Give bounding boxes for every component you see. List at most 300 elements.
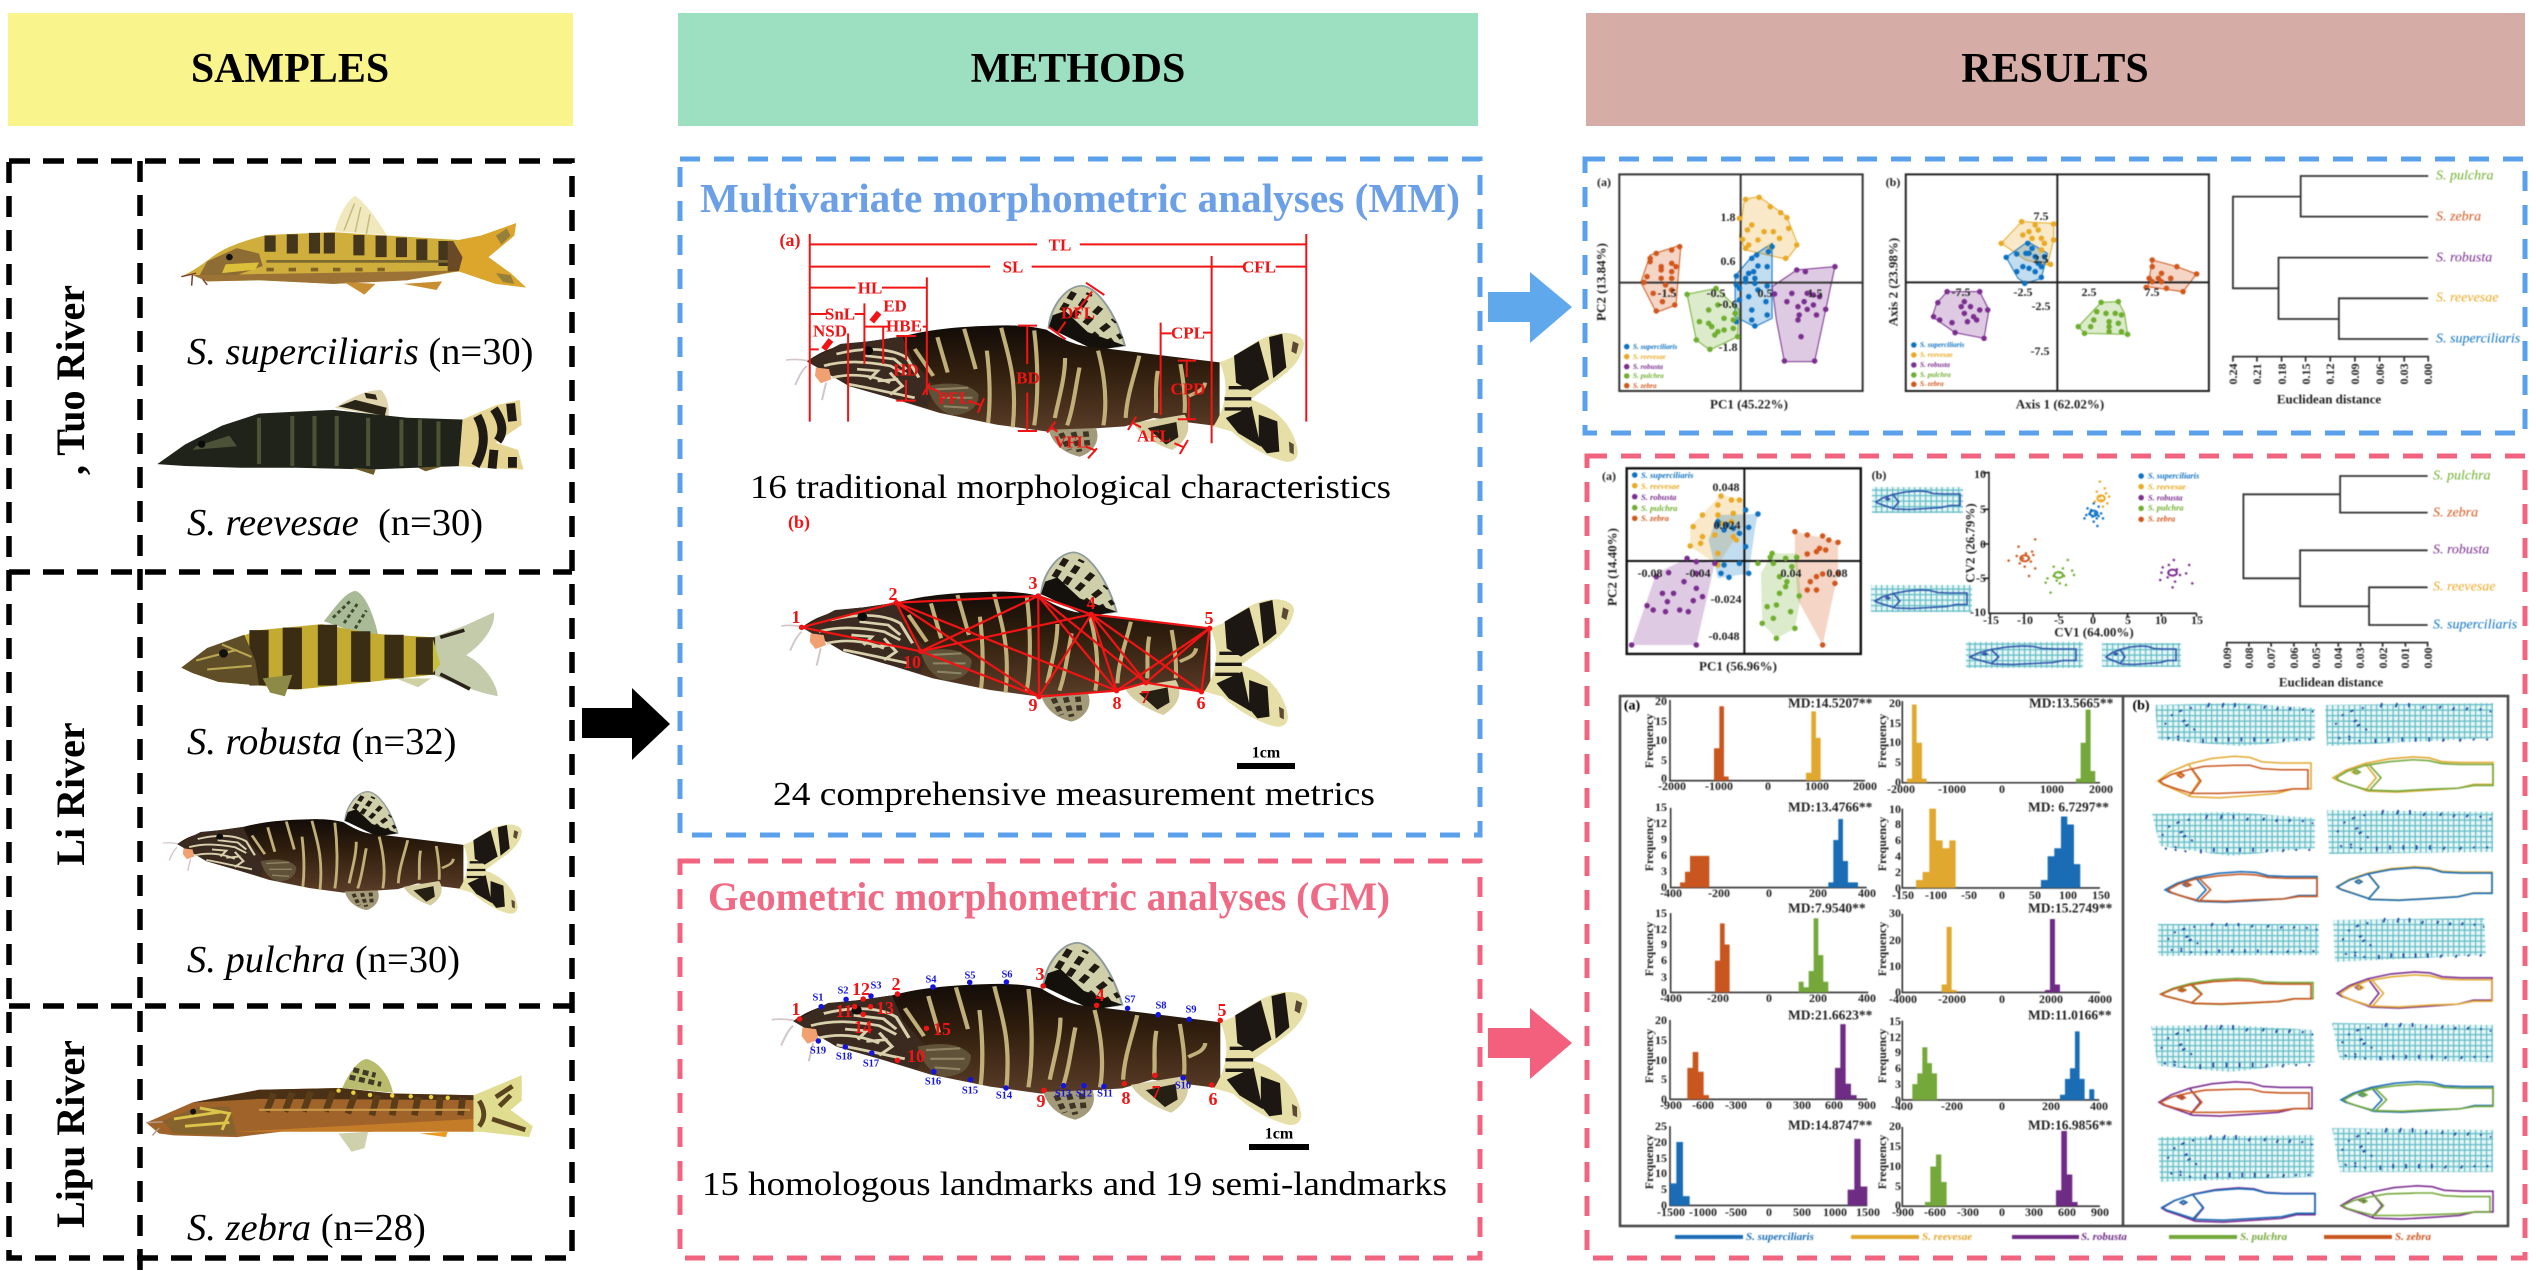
axis text and legend: (a) bbox=[1597, 175, 1611, 189]
arrow: to GM results bbox=[1488, 1008, 1572, 1079]
histogram x axis labels: -150 bbox=[1892, 888, 1914, 902]
fish photo substitute bbox=[772, 943, 1308, 1125]
histogram x axis labels: 0 bbox=[1766, 1205, 1772, 1219]
axis text and legend: S. reevesae bbox=[1633, 353, 1667, 361]
legend: species colours: S. superciliaris bbox=[1746, 1231, 1814, 1243]
axis text and legend: -1.5 bbox=[1658, 286, 1676, 300]
histogram x axis labels: 1000 bbox=[1805, 779, 1829, 793]
plot area and clusters bbox=[1627, 468, 1861, 654]
truss labels: 10 bbox=[903, 652, 921, 672]
histogram y axis labels: 0 bbox=[1895, 1198, 1901, 1212]
semi-landmark labels: S4 bbox=[925, 974, 937, 986]
species labels: S. pulchra bbox=[2436, 168, 2494, 184]
histogram y axis labels: 0 bbox=[1895, 1093, 1901, 1107]
distance axis labels: 0.09 bbox=[2220, 648, 2234, 668]
histogram x axis labels: -500 bbox=[1725, 1205, 1747, 1219]
legend: species colours: S. reevesae bbox=[1922, 1231, 1972, 1243]
semi-landmark labels: S19 bbox=[810, 1046, 826, 1056]
histogram y axis labels: 3 bbox=[1661, 864, 1667, 878]
histogram y axis labels: 10 bbox=[1655, 1053, 1667, 1067]
axis text and legend: 1.8 bbox=[1720, 210, 1736, 224]
species labels: S. pulchra bbox=[2433, 468, 2491, 484]
fish: S. superciliaris bbox=[181, 196, 526, 295]
semi-landmark labels: S3 bbox=[870, 980, 882, 992]
measurement labels: CFL bbox=[1242, 258, 1276, 276]
histogram y axis labels: 6 bbox=[1895, 1061, 1901, 1075]
panel: samples bbox=[9, 161, 572, 1271]
histogram y axis labels: 12 bbox=[1655, 816, 1667, 830]
measurement labels: (a) bbox=[780, 230, 800, 251]
legend: species colours: S. robusta bbox=[2081, 1231, 2127, 1243]
histogram y axis labels: 9 bbox=[1895, 1045, 1901, 1059]
histogram x axis labels: 2000 bbox=[1853, 779, 1877, 793]
semi-landmark labels: S7 bbox=[1124, 994, 1136, 1006]
distance axis labels: 0.08 bbox=[2242, 648, 2256, 668]
histogram x axis labels: 0 bbox=[1766, 1098, 1772, 1112]
measurement labels: PFL bbox=[938, 388, 970, 408]
axis text and legend: 10 bbox=[2155, 613, 2167, 627]
species labels: S. robusta bbox=[2433, 542, 2489, 558]
histogram y axis labels: 15 bbox=[1889, 1014, 1901, 1028]
axis text and legend: S. zebra bbox=[1633, 382, 1657, 390]
axis text and legend: 15 bbox=[2191, 613, 2203, 627]
histogram x axis labels: -2000 bbox=[1938, 992, 1966, 1006]
distance axis labels: 0.06 bbox=[2373, 364, 2387, 384]
histogram x axis labels: -200 bbox=[1707, 991, 1729, 1005]
histogram x axis labels: 900 bbox=[1858, 1098, 1876, 1112]
histogram y axis labels: 15 bbox=[1655, 1151, 1667, 1165]
axis text and legend: 0.04 bbox=[1780, 566, 1802, 580]
histogram x axis labels: -400 bbox=[1891, 1099, 1913, 1113]
truss labels: 3 bbox=[1028, 573, 1038, 593]
axis text and legend: S. reevesae bbox=[1641, 481, 1680, 491]
axis text and legend bbox=[1594, 175, 1822, 412]
histogram x axis labels: 0 bbox=[1999, 1205, 2005, 1219]
truss labels: 2 bbox=[888, 584, 898, 604]
caption: traditional characteristics: 16 traditional morphological characteristics bbox=[750, 469, 1391, 506]
histogram y axis labels: 15 bbox=[1889, 1139, 1901, 1153]
histogram x axis labels: -300 bbox=[1725, 1098, 1747, 1112]
axis text and legend bbox=[1872, 467, 2203, 640]
semi-landmark labels: S13 bbox=[1055, 1088, 1071, 1100]
measurement labels: HL bbox=[858, 278, 882, 298]
panel: GM results bbox=[1587, 456, 2525, 1258]
axis text and legend: S. zebra bbox=[1920, 380, 1944, 388]
axis text and legend: -0.04 bbox=[1686, 566, 1710, 580]
measurement labels: HBE bbox=[886, 316, 922, 336]
panel border bbox=[1585, 159, 2525, 433]
species label: pulchra: S. pulchra (n=30) bbox=[187, 939, 460, 981]
histogram x axis labels bbox=[1657, 779, 2113, 1219]
histogram y axis labels: 8 bbox=[1895, 817, 1901, 831]
heading: GM: Geometric morphometric analyses (GM) bbox=[708, 874, 1390, 919]
axis text and legend: S. zebra bbox=[2148, 514, 2175, 524]
species labels: S. superciliaris bbox=[2433, 618, 2518, 632]
histogram y axis labels: 5 bbox=[1895, 1179, 1901, 1193]
shape deformation thumbnails bbox=[1871, 487, 2181, 668]
histogram x axis labels: 300 bbox=[1793, 1098, 1811, 1112]
homologous landmark labels: 6 bbox=[1208, 1089, 1218, 1109]
histogram x axis labels: 0 bbox=[1999, 992, 2005, 1006]
heading: MM: Multivariate morphometric analyses (MM) bbox=[700, 175, 1460, 221]
fish with landmarks bbox=[772, 943, 1309, 1150]
axis text and legend bbox=[1602, 469, 1848, 674]
histogram x axis labels: 500 bbox=[1793, 1205, 1811, 1219]
axis text and legend: 0 bbox=[2090, 613, 2096, 627]
measurement labels: CPD bbox=[1171, 380, 1205, 398]
histogram y axis labels: 10 bbox=[1889, 1159, 1901, 1173]
histogram y axis labels: 20 bbox=[1889, 933, 1901, 947]
axis text and legend: 5 bbox=[2125, 613, 2131, 627]
histogram x axis labels: -900 bbox=[1892, 1205, 1914, 1219]
histogram y axis labels: 9 bbox=[1661, 937, 1667, 951]
histogram y axis labels: 15 bbox=[1655, 906, 1667, 920]
frequency axis titles: Frequency bbox=[1875, 817, 1889, 871]
histogram x axis labels: 400 bbox=[1858, 991, 1876, 1005]
homologous landmark labels: 10 bbox=[907, 1046, 925, 1066]
histogram x axis labels: 2000 bbox=[2089, 782, 2113, 796]
axis text and legend: -5 bbox=[1976, 571, 1986, 585]
axis text and legend: S. robusta bbox=[1633, 363, 1663, 371]
truss labels: 7 bbox=[1140, 687, 1150, 707]
frequency axis titles: Frequency bbox=[1875, 1135, 1889, 1189]
homologous landmark labels: 9 bbox=[1036, 1091, 1046, 1111]
axis text and legend: S. pulchra bbox=[1920, 371, 1951, 379]
measurement labels: TL bbox=[1049, 236, 1071, 254]
histogram y axis labels: 10 bbox=[1655, 733, 1667, 747]
histogram y axis labels: 20 bbox=[1655, 1013, 1667, 1027]
axis text and legend bbox=[1886, 175, 2160, 412]
histogram x axis labels: 50 bbox=[2029, 888, 2041, 902]
CVA axes and points bbox=[1983, 472, 2197, 617]
panel letters: (b) bbox=[2132, 698, 2150, 714]
axis text and legend: S. pulchra bbox=[1641, 503, 1678, 513]
distance axis labels: 0.06 bbox=[2287, 648, 2301, 668]
legend: species colours: S. pulchra bbox=[2240, 1231, 2288, 1243]
deformation grids bbox=[2151, 703, 2493, 1182]
histogram x axis labels: -2000 bbox=[1658, 779, 1686, 793]
histogram x axis labels: -2000 bbox=[1887, 782, 1915, 796]
header: samples: SAMPLES bbox=[191, 46, 389, 92]
histogram y axis labels: 12 bbox=[1655, 922, 1667, 936]
distance axis labels: 0.02 bbox=[2376, 648, 2390, 668]
measurement labels: AFL bbox=[1137, 426, 1171, 446]
truss labels: 1 bbox=[792, 607, 800, 627]
histogram x axis labels: -1000 bbox=[1689, 1205, 1717, 1219]
histogram x axis labels: -200 bbox=[1941, 1099, 1963, 1113]
axis text and legend: S. superciliaris bbox=[1641, 470, 1694, 480]
histogram x axis labels: -300 bbox=[1957, 1205, 1979, 1219]
histogram y axis labels bbox=[1655, 694, 1901, 1212]
mean difference labels: MD:21.6623** bbox=[1788, 1008, 1873, 1022]
fish with morphological measures bbox=[780, 230, 1306, 462]
mean difference labels: MD: 6.7297** bbox=[2028, 800, 2109, 814]
histogram x axis labels: -600 bbox=[1692, 1098, 1714, 1112]
axis text and legend: 0 bbox=[1980, 537, 1986, 551]
axis text and legend: -0.024 bbox=[1710, 592, 1742, 606]
histogram y axis labels: 6 bbox=[1895, 833, 1901, 847]
histogram y axis labels: 20 bbox=[1889, 696, 1901, 710]
histogram x axis labels: 100 bbox=[2059, 888, 2077, 902]
histogram y axis labels: 25 bbox=[1655, 1119, 1667, 1133]
axis text and legend: 2.5 bbox=[2082, 285, 2096, 299]
measurement labels: CPL bbox=[1171, 324, 1205, 342]
histogram x axis labels: 400 bbox=[1858, 886, 1876, 900]
histogram x axis labels: -900 bbox=[1660, 1098, 1682, 1112]
fish: S. reevesae bbox=[157, 390, 524, 475]
semi-landmark labels: S1 bbox=[812, 992, 824, 1004]
histogram y axis labels: 9 bbox=[1661, 832, 1667, 846]
axis text and legend: 0.024 bbox=[1714, 518, 1740, 532]
semi-landmark labels: S12 bbox=[1076, 1088, 1092, 1100]
histogram y axis labels: 30 bbox=[1889, 906, 1901, 920]
axis text and legend: 7.5 bbox=[2034, 209, 2048, 223]
homologous landmark labels: 7 bbox=[1152, 1082, 1160, 1102]
panel: geometric morphometric analyses bbox=[680, 861, 1480, 1258]
species labels: S. reevesae bbox=[2433, 580, 2495, 594]
header: samples bbox=[8, 13, 573, 126]
truss labels: 4 bbox=[1086, 593, 1096, 613]
axis text and legend: (b) bbox=[1872, 468, 1886, 482]
histogram x axis labels: -4000 bbox=[1889, 992, 1917, 1006]
distance axis labels: 0.21 bbox=[2250, 364, 2264, 384]
plot area and clusters bbox=[1906, 174, 2209, 391]
axis text and legend: S. reevesae bbox=[1920, 351, 1954, 359]
fish with truss network bbox=[781, 512, 1295, 769]
homologous landmark labels: 3 bbox=[1036, 964, 1044, 984]
histogram y axis labels: 10 bbox=[1889, 959, 1901, 973]
truss labels: 5 bbox=[1204, 608, 1214, 628]
histogram x axis labels: 0 bbox=[1766, 991, 1772, 1005]
histogram y axis labels: 6 bbox=[1661, 953, 1667, 967]
axis text and legend: 2.5 bbox=[2034, 252, 2048, 266]
histogram y axis labels: 3 bbox=[1661, 970, 1667, 984]
histogram x axis labels: 600 bbox=[1825, 1098, 1843, 1112]
species label: superciliaris: S. superciliaris (n=30) bbox=[187, 331, 533, 373]
frequency axis titles: Frequency bbox=[1875, 1029, 1889, 1083]
semi-landmark labels: S8 bbox=[1155, 1000, 1167, 1012]
panel letters: (a) bbox=[1624, 698, 1640, 714]
distance axis labels: 0.00 bbox=[2421, 648, 2435, 668]
axis text and legend: S. superciliaris bbox=[2148, 472, 2199, 480]
semi-landmark labels: S6 bbox=[1001, 970, 1013, 980]
mean difference labels: MD:13.4766** bbox=[1788, 800, 1873, 814]
caption: comprehensive metrics: 24 comprehensive measurement metrics bbox=[773, 776, 1375, 813]
distance axis labels: 0.12 bbox=[2323, 364, 2337, 384]
histogram x axis labels: 200 bbox=[1809, 886, 1827, 900]
dendrogram: MM bbox=[2226, 168, 2521, 406]
header: results: RESULTS bbox=[1961, 46, 2149, 92]
histogram y axis labels: 4 bbox=[1895, 849, 1901, 863]
histogram x axis labels: 900 bbox=[2091, 1205, 2109, 1219]
histogram x axis labels: 0 bbox=[1765, 779, 1771, 793]
histogram y axis labels: 0 bbox=[1661, 1092, 1667, 1106]
scatter: CVA (b) bbox=[1871, 467, 2203, 668]
histogram x axis labels: 200 bbox=[1809, 991, 1827, 1005]
arrow: to MM results bbox=[1488, 272, 1572, 343]
truss labels: (b) bbox=[788, 512, 810, 533]
panel frame bbox=[1620, 696, 2508, 1226]
fish photo substitute bbox=[786, 286, 1304, 462]
species labels: S. robusta bbox=[2436, 250, 2492, 266]
histogram y axis labels: 0 bbox=[1661, 985, 1667, 999]
distance axis labels: Euclidean distance bbox=[2277, 392, 2381, 406]
frequency axis titles: Frequency bbox=[1642, 714, 1656, 768]
axis text and legend: S. robusta bbox=[2148, 494, 2183, 502]
histogram y axis labels: 20 bbox=[1889, 1119, 1901, 1133]
semi-landmark labels: S14 bbox=[996, 1090, 1013, 1102]
species labels: S. zebra bbox=[2436, 210, 2481, 224]
fish: S. pulchra bbox=[163, 792, 522, 914]
species labels: S. reevesae bbox=[2436, 290, 2498, 306]
axis text and legend: -0.048 bbox=[1708, 629, 1740, 643]
species labels: S. zebra bbox=[2433, 506, 2478, 520]
river label: Tuo River: , Tuo River bbox=[48, 285, 93, 475]
homologous landmark labels: 4 bbox=[1096, 985, 1104, 1005]
distance axis labels: 0.00 bbox=[2421, 364, 2435, 384]
histogram y axis labels: 10 bbox=[1655, 1166, 1667, 1180]
header: results bbox=[1586, 13, 2525, 126]
histogram y axis labels: 3 bbox=[1895, 1077, 1901, 1091]
dashed sample grid bbox=[9, 161, 572, 1271]
axis text and legend: (a) bbox=[1602, 469, 1616, 483]
homologous landmark labels: 13 bbox=[876, 998, 894, 1018]
homologous landmark labels: 12 bbox=[852, 979, 870, 999]
frequency axis titles: Frequency bbox=[1642, 1029, 1656, 1083]
histogram x axis labels: 600 bbox=[2058, 1205, 2076, 1219]
arrow: samples to methods bbox=[582, 688, 670, 760]
histogram y axis labels: 15 bbox=[1655, 800, 1667, 814]
homologous landmark labels bbox=[792, 964, 1226, 1111]
fish: S. zebra bbox=[146, 1059, 533, 1152]
axis text and legend: 10 bbox=[1974, 467, 1986, 481]
measurement labels: SnL bbox=[825, 304, 855, 324]
scale bar bbox=[1237, 744, 1295, 769]
axis text and legend: CV1 (64.00%) bbox=[2054, 624, 2134, 640]
distance axis labels: Euclidean distance bbox=[2279, 674, 2383, 690]
axis text and legend: PC2 (14.40%) bbox=[1604, 528, 1620, 606]
distance axis labels: 0.18 bbox=[2275, 364, 2289, 384]
semi-landmark labels: S9 bbox=[1185, 1004, 1197, 1016]
panel: multivariate morphometric analyses bbox=[680, 159, 1480, 835]
header: methods bbox=[678, 13, 1478, 126]
axis text and legend: 0.048 bbox=[1712, 480, 1740, 494]
distance axis labels: 0.24 bbox=[2226, 364, 2240, 384]
histogram x axis labels: 2000 bbox=[2039, 992, 2063, 1006]
distance axis labels: 0.05 bbox=[2309, 648, 2323, 668]
measurement labels: ED bbox=[883, 296, 907, 316]
frequency axis titles: Frequency bbox=[1875, 922, 1889, 976]
axis text and legend: PC2 (13.84%) bbox=[1594, 243, 1608, 321]
histogram y axis labels: 0 bbox=[1895, 881, 1901, 895]
histogram y axis labels: 12 bbox=[1889, 1030, 1901, 1044]
axis text and legend: S. reevesae bbox=[2148, 482, 2186, 492]
semi-landmark labels: S11 bbox=[1097, 1088, 1113, 1100]
axis text and legend: 1.5 bbox=[1808, 286, 1822, 300]
histogram y axis labels: 6 bbox=[1661, 848, 1667, 862]
mean difference labels: MD:15.2749** bbox=[2028, 900, 2113, 916]
axis text and legend: 5 bbox=[1980, 502, 1986, 516]
distance axis labels: 0.04 bbox=[2331, 648, 2345, 668]
measurement labels: VFL bbox=[1054, 432, 1088, 452]
homologous landmark labels: 1 bbox=[792, 999, 800, 1019]
fish photo substitute bbox=[781, 552, 1294, 727]
axis text and legend: 0.6 bbox=[1720, 254, 1736, 268]
axis text and legend: (b) bbox=[1886, 175, 1900, 189]
species label: zebra: S. zebra (n=28) bbox=[187, 1207, 426, 1249]
axis text and legend: 0.08 bbox=[1826, 566, 1848, 580]
histogram x axis labels: -200 bbox=[1708, 886, 1730, 900]
mean difference labels: MD:16.9856** bbox=[2028, 1118, 2113, 1132]
axis text and legend: S. pulchra bbox=[2148, 504, 2184, 512]
histogram x axis labels: 4000 bbox=[2088, 992, 2112, 1006]
axis text and legend: -7.5 bbox=[1952, 285, 1970, 299]
histogram x axis labels: -1000 bbox=[1938, 782, 1966, 796]
homologous landmark labels: 2 bbox=[892, 974, 900, 994]
histogram x axis labels: -100 bbox=[1925, 888, 1947, 902]
histogram y axis labels: 20 bbox=[1655, 694, 1667, 708]
panel border bbox=[1587, 456, 2525, 1258]
panel border bbox=[680, 861, 1480, 1258]
measurement labels: SL bbox=[1003, 258, 1023, 276]
histogram y axis labels: 0 bbox=[1895, 775, 1901, 789]
histogram x axis labels: 200 bbox=[2042, 1099, 2060, 1113]
species labels bbox=[2433, 468, 2518, 632]
species labels bbox=[2436, 168, 2521, 346]
histogram bars and axes bbox=[1670, 700, 2100, 1206]
histogram x axis labels: -1500 bbox=[1657, 1205, 1685, 1219]
legend: species colours bbox=[1675, 1231, 2432, 1243]
histogram x axis labels: -400 bbox=[1660, 991, 1682, 1005]
species label: reevesae: S. reevesae (n=30) bbox=[187, 502, 483, 544]
species label: robusta: S. robusta (n=32) bbox=[187, 721, 456, 763]
histogram y axis labels: 5 bbox=[1661, 1182, 1667, 1196]
axis text and legend: Axis 2 (23.98%) bbox=[1886, 238, 1900, 326]
histogram x axis labels: 400 bbox=[2090, 1099, 2108, 1113]
histogram y axis labels: 15 bbox=[1889, 716, 1901, 730]
axis text and legend: S. zebra bbox=[1641, 513, 1670, 523]
mean difference labels bbox=[1788, 696, 2114, 1132]
scale bar: 1cm bbox=[1252, 744, 1281, 762]
histogram y axis labels: 20 bbox=[1655, 1135, 1667, 1149]
consensus outlines bbox=[2158, 756, 2493, 1222]
semi-landmark labels: S16 bbox=[925, 1076, 941, 1088]
histogram y axis labels: 15 bbox=[1655, 714, 1667, 728]
mean difference labels: MD:14.5207** bbox=[1788, 696, 1873, 710]
axis text and legend: -2.5 bbox=[2032, 299, 2050, 313]
distance axis labels: 0.01 bbox=[2398, 648, 2412, 668]
measurement labels: NSD bbox=[813, 322, 847, 340]
semi-landmark labels: S2 bbox=[837, 986, 849, 996]
truss lines bbox=[802, 596, 1210, 697]
distance axis labels: 0.09 bbox=[2348, 364, 2362, 384]
axis text and legend: S. pulchra bbox=[1633, 372, 1664, 380]
truss labels bbox=[788, 512, 1214, 715]
semi-landmark labels: S18 bbox=[836, 1052, 852, 1062]
measurement labels: HD bbox=[893, 360, 919, 380]
axis text and legend: -7.5 bbox=[2030, 344, 2050, 358]
distance axis labels bbox=[2220, 648, 2435, 690]
homologous landmark labels: 14 bbox=[854, 1017, 872, 1037]
axis text and legend: -10 bbox=[2017, 613, 2033, 627]
mean difference labels: MD:13.5665** bbox=[2029, 696, 2114, 710]
histogram x axis labels: 0 bbox=[1999, 1099, 2005, 1113]
histogram y axis labels: 5 bbox=[1661, 1072, 1667, 1086]
panel: MM results bbox=[1585, 159, 2525, 433]
frequency axis titles: Frequency bbox=[1642, 1135, 1656, 1189]
axis text and legend: S. superciliaris bbox=[1920, 341, 1965, 349]
histogram y axis labels: 5 bbox=[1895, 755, 1901, 769]
